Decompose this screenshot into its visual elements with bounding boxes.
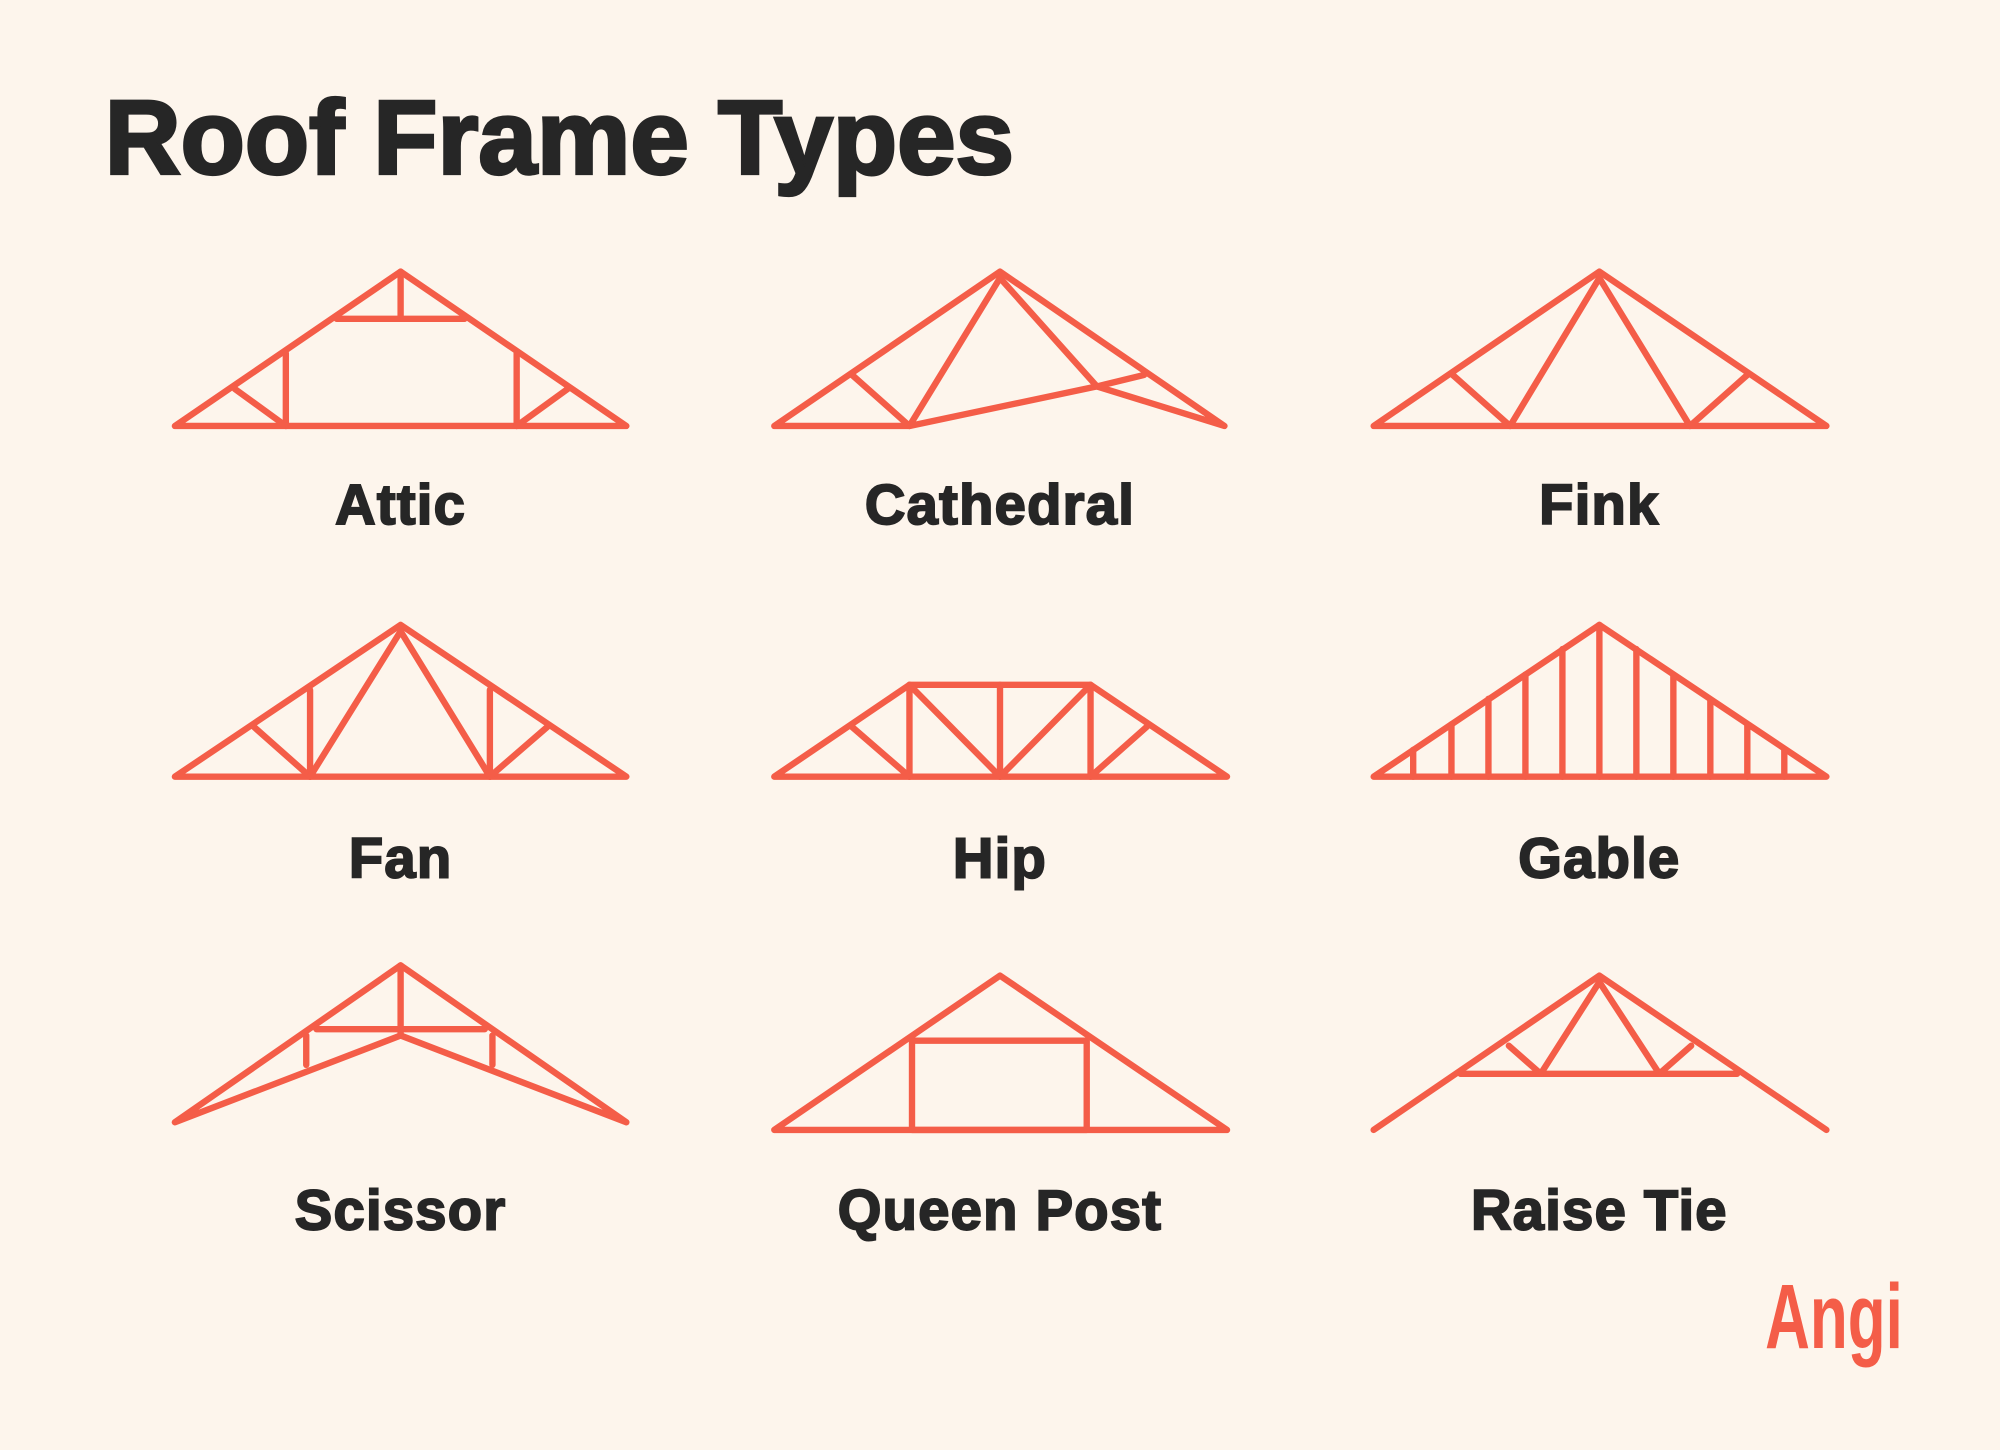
label: hip: Hip — [953, 826, 1047, 889]
logo: angi: Angi — [1765, 1266, 1903, 1368]
title: Roof Frame Types — [105, 79, 1014, 196]
label: attic: Attic — [335, 473, 466, 536]
truss: hip — [774, 685, 1227, 777]
label: cathedral: Cathedral — [865, 473, 1135, 536]
truss: cathedral — [774, 272, 1224, 426]
truss: fink — [1374, 272, 1826, 426]
label: gable: Gable — [1518, 826, 1681, 889]
label: scissor: Scissor — [295, 1178, 506, 1241]
truss: raise tie — [1374, 976, 1826, 1130]
truss: queen post — [774, 976, 1227, 1130]
truss: fan — [175, 625, 626, 777]
truss: scissor — [175, 965, 626, 1122]
truss: gable — [1374, 625, 1826, 777]
label: fan: Fan — [349, 826, 452, 889]
label: fink: Fink — [1539, 473, 1660, 536]
label: raise tie: Raise Tie — [1471, 1178, 1728, 1241]
label: queen post: Queen Post — [838, 1178, 1162, 1241]
truss: attic — [175, 272, 626, 426]
